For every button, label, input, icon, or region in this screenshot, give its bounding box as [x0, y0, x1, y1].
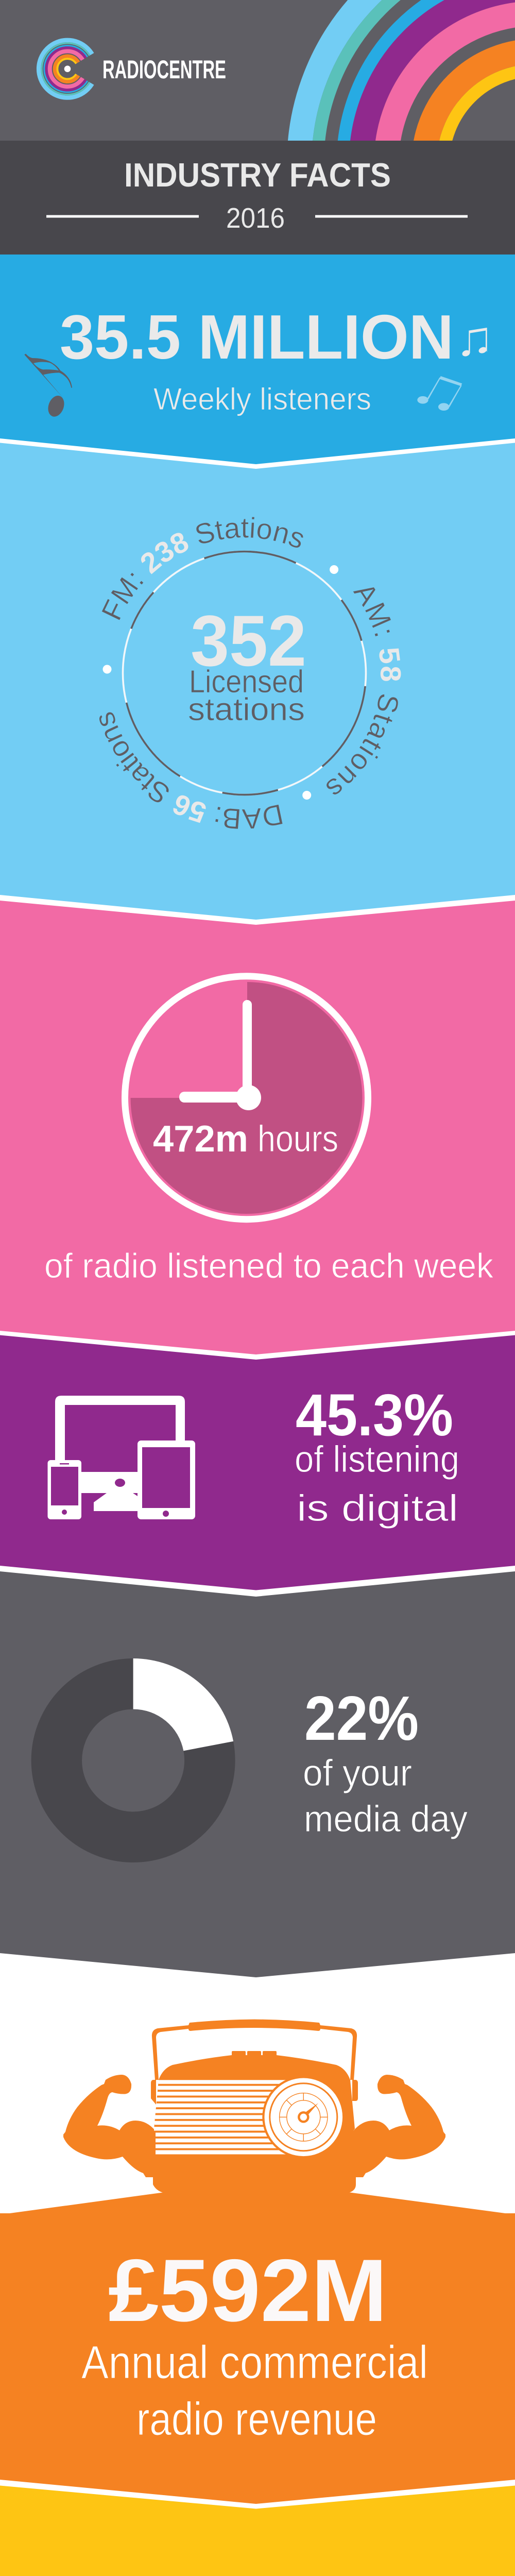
panel: title band — [0, 141, 515, 255]
total label: stations — [188, 692, 305, 727]
label: DAB stations: DAB: 56 Stations — [99, 712, 282, 829]
label: FM stations: FM: 238 Stations — [102, 517, 303, 620]
label: AM stations: AM: 58 Stations — [327, 587, 401, 794]
panel: hours listened — [0, 901, 515, 1354]
stat: 45.3% — [296, 1382, 453, 1448]
clock value: 472m — [153, 1118, 248, 1160]
total number: 352 — [191, 600, 306, 681]
subheading: Weekly listeners — [153, 382, 371, 416]
logo — [39, 38, 226, 100]
ring separators — [103, 565, 338, 800]
clock chart — [125, 976, 368, 1219]
panel: digital listening — [0, 1335, 515, 1590]
icon: pale music notes — [417, 376, 462, 411]
panel: commercial revenue — [0, 2020, 515, 2504]
panel: header — [0, 0, 515, 141]
ring chart of station types — [90, 518, 399, 828]
stat caption: media day — [304, 1799, 468, 1840]
stat caption: of your — [303, 1753, 412, 1794]
logo: RADIOCENTRE — [102, 55, 226, 84]
panel: media day — [0, 1571, 515, 1977]
icon: devices — [47, 1396, 195, 1519]
rainbow arcs — [288, 0, 515, 141]
title: INDUSTRY FACTS — [124, 156, 391, 194]
stat caption: is digital — [297, 1488, 458, 1529]
stat caption: of listening — [295, 1439, 459, 1480]
total label: Licensed — [189, 664, 304, 700]
donut chart — [57, 1658, 233, 1837]
year: 2016 — [226, 202, 285, 234]
icon: muscular radio — [63, 2020, 445, 2193]
stat: 22% — [304, 1683, 419, 1753]
revenue figure: £592M — [108, 2241, 387, 2340]
revenue caption: radio revenue — [136, 2394, 377, 2445]
icon: dark music note — [24, 354, 72, 419]
panel: licensed stations — [0, 443, 515, 920]
icon: white music notes — [461, 328, 488, 358]
clock value: hours — [258, 1118, 338, 1160]
headline number: 35.5 MILLION — [60, 302, 454, 372]
panel: weekly listeners — [0, 255, 515, 464]
caption: of radio listened to each week — [44, 1246, 494, 1285]
revenue caption: Annual commercial — [81, 2337, 428, 2388]
panel: tracks played — [0, 2485, 515, 2576]
